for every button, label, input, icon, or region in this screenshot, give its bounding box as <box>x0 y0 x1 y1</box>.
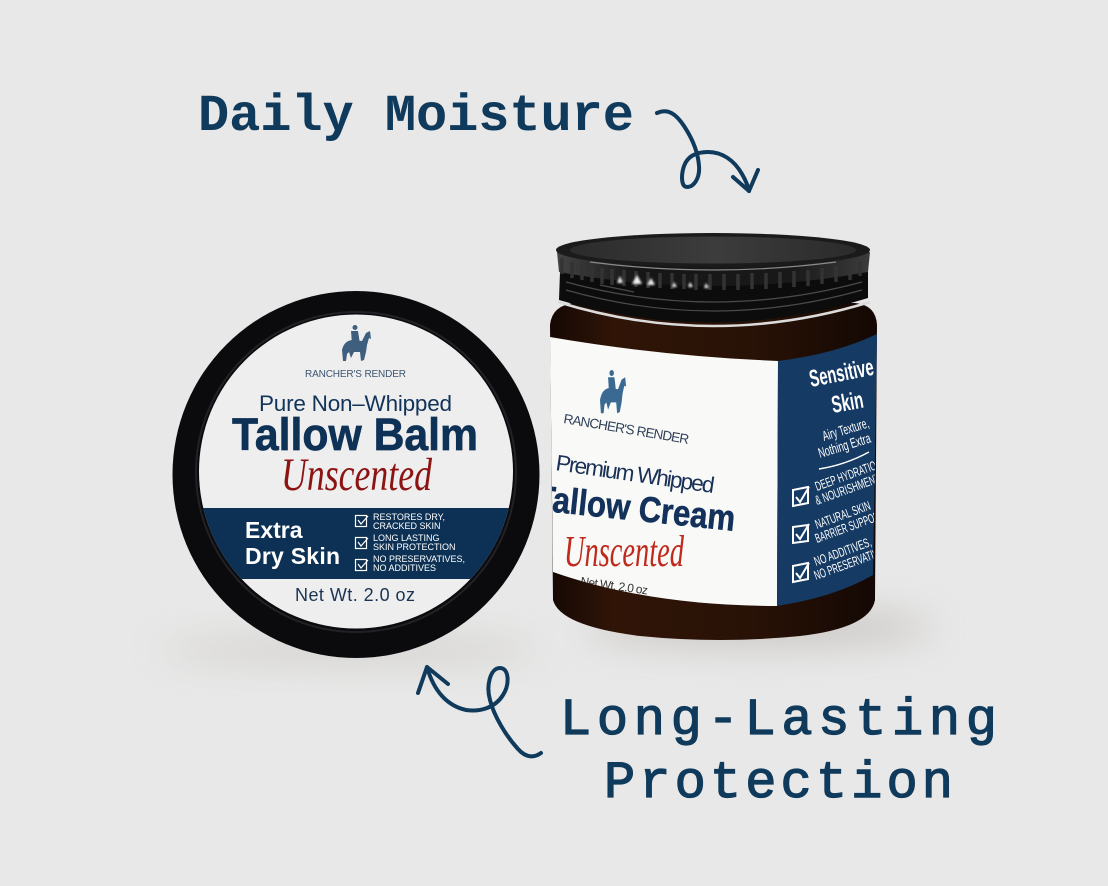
product name: Tallow Cream <box>534 477 737 539</box>
side checklist: NO ADDITIVES, <box>812 534 873 569</box>
side checklist <box>814 461 875 580</box>
heading: Long-Lasting Protection: Long-Lasting <box>560 691 997 750</box>
band checkboxes <box>356 516 368 570</box>
scent: Unscented <box>281 449 432 501</box>
tin white label <box>199 314 513 628</box>
icon: horse and rider <box>600 370 626 413</box>
arrow: daily moisture to jar <box>657 111 758 191</box>
side checklist: & NOURISHMENT <box>813 470 882 508</box>
icon: horse and rider <box>342 325 371 361</box>
side checkboxes <box>793 487 809 582</box>
product line: Pure Non–Whipped <box>259 391 452 416</box>
jar: whipped tallow cream <box>534 233 891 640</box>
arrow: long-lasting protection to tin <box>418 667 541 756</box>
band checklist: CRACKED SKIN <box>373 521 441 531</box>
side heading: Sensitive <box>807 354 876 393</box>
product line: Premium Whipped <box>554 450 716 498</box>
side subheading: Airy Texture, <box>820 415 871 444</box>
heading: Long-Lasting Protection: Protection <box>604 754 953 813</box>
band checklist: LONG LASTING <box>373 533 440 543</box>
jar label: blue side panel <box>777 334 877 606</box>
band heading: Extra <box>245 517 303 543</box>
heading: Daily Moisture: Daily Moisture <box>198 87 634 146</box>
product name: Tallow Balm <box>232 409 478 460</box>
band checklist: NO ADDITIVES <box>373 563 436 573</box>
jar label: white front <box>550 337 778 606</box>
side subheading: Nothing Extra <box>816 430 873 461</box>
net weight: Net Wt. 2.0 oz <box>580 574 649 597</box>
side checklist: NATURAL SKIN <box>813 498 873 532</box>
band checklist <box>373 512 465 573</box>
brand name: RANCHER'S RENDER <box>305 369 406 380</box>
side heading: Skin <box>829 387 866 419</box>
band checklist: RESTORES DRY, <box>373 512 445 522</box>
tin: tallow balm <box>172 291 540 658</box>
band checklist: NO PRESERVATIVES, <box>373 554 465 564</box>
side subheading <box>818 421 872 458</box>
jar glass body <box>550 303 877 640</box>
brand name: RANCHER'S RENDER <box>563 411 690 447</box>
side checklist: NO PRESERVATIVES <box>812 542 891 583</box>
band checklist: SKIN PROTECTION <box>373 542 456 552</box>
jar lid <box>556 233 870 326</box>
side heading <box>809 360 874 412</box>
jar label artwork <box>552 360 875 594</box>
product shadow <box>160 608 935 662</box>
side checklist: BARRIER SUPPORT <box>813 507 886 546</box>
blue band <box>190 508 520 579</box>
net weight: Net Wt. 2.0 oz <box>295 585 415 605</box>
band heading: Dry Skin <box>245 543 340 569</box>
scent: Unscented <box>564 527 685 576</box>
tin black rim <box>172 291 540 658</box>
heading: Long-Lasting Protection <box>560 691 997 813</box>
band heading <box>245 517 340 569</box>
side checklist: DEEP HYDRATION <box>813 456 884 494</box>
